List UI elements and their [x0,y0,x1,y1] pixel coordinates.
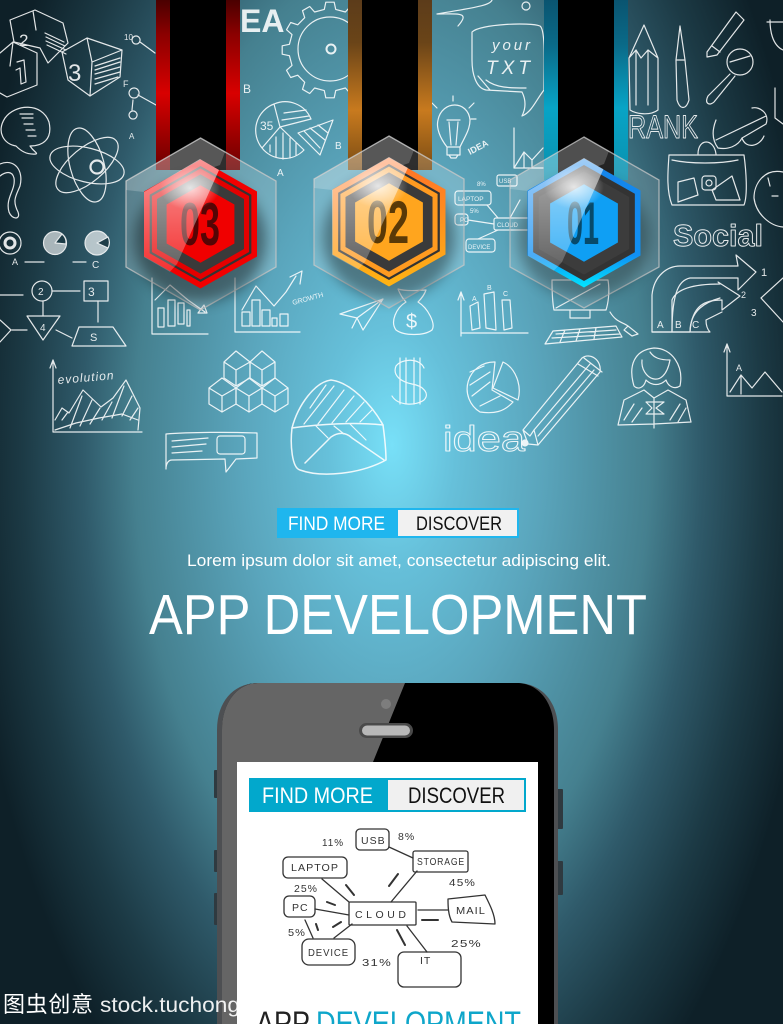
speaker [359,723,413,738]
doodles: pie dots and flowchart: A [12,257,18,267]
number 03: 03 [180,191,220,258]
cloud diagram: DEVICE [308,947,349,959]
doodles: small mind map: 8% [477,182,486,188]
doodles: small mind map: CLOUD [497,223,519,229]
screen buttons: FIND MORE [262,783,373,808]
screen reflection [222,683,405,1024]
doodles: pie dots and flowchart: S [90,332,97,344]
phone [214,683,563,1024]
cloud diagram: MAIL [456,905,486,917]
doodle: dollar sign [392,358,426,404]
doodles: top left cubes [0,10,122,97]
glass reflection [126,138,225,192]
cloud diagram: 25% [294,883,318,895]
cloud diagram: USB [361,835,386,847]
doodle: right chart [724,344,782,396]
doodles: bar charts, plane and money bag [152,271,433,334]
doodles: pie dots and flowchart: 3 [88,285,95,299]
doodles: bars and computer [458,280,638,344]
doodle: right chart: A [736,363,742,373]
doodles: top left cubes: 2 [19,31,28,50]
doodles: gear, pie and idea lettering: B [243,82,251,96]
cloud diagram: LAPTOP [291,862,339,874]
cloud diagram: 31% [362,957,392,969]
doodles: pens, magnifier and rank [628,12,767,149]
side buttons [214,770,563,925]
ribbon: orange [348,0,432,170]
doodle: idea lettering: idea [443,418,526,459]
cloud diagram [283,829,495,987]
title: APP DEVELOPMENT [149,583,647,647]
number 02: 02 [367,189,409,256]
glare [528,158,604,270]
doodle: evolution chart [50,360,142,432]
doodles: bars and computer: C [503,291,508,298]
badge 01: blue hexagon [510,137,659,308]
glass hexagon plate [126,138,276,310]
ribbon: blue [544,0,628,180]
doodles: gear, pie and idea lettering: A [277,168,284,179]
cloud diagram: STORAGE [417,856,465,868]
doodles: pens, magnifier and rank: RANK [628,109,698,145]
doodles: bulb, speech bubble and mini charts: TXT [486,58,531,79]
doodles: small mind map: LAPTOP [458,196,484,203]
doodles: left column speech bubble, atom, question mark [0,33,156,218]
doodle: evolution chart: evolution [57,368,114,387]
glare [144,159,219,272]
doodles: gear, pie and idea lettering [240,2,362,179]
doodles: bars and computer: A [472,296,477,303]
doodles: gear, pie and idea lettering: B [335,141,342,152]
cloud diagram: 45% [449,877,476,889]
screen title [260,1011,520,1024]
cloud diagram: 8% [398,831,415,843]
doodles: bars and computer: B [487,285,492,292]
doodles: bulb, speech bubble and mini charts: IDEA [466,138,490,157]
doodles: briefcase, clock, social and arrows [652,20,783,332]
doodles: gear, pie and idea lettering: EA [240,3,284,39]
button: find more / discover: FIND MORE [288,514,385,535]
cloud diagram: IT [420,955,431,967]
doodles: briefcase, clock, social and arrows: 2 [741,290,746,300]
doodles: small mind map: DEVICE [468,245,490,251]
drop shadow [518,178,650,298]
doodle: big pencil [522,356,602,446]
doodles: small mind map: USB [499,179,511,185]
doodles: pie dots and flowchart: 4 [40,323,46,334]
glass hexagon plate [510,137,659,308]
doodle: envelope [291,380,386,474]
doodles: small mind map [455,175,530,252]
glass reflection [510,137,609,191]
layered hexagons [528,158,640,288]
ribbon: red [156,0,240,170]
layered hexagons [144,160,257,288]
doodles: gear, pie and idea lettering: 35 [260,119,274,133]
doodles: small mind map: 5% [470,209,479,215]
layered hexagons [332,158,446,286]
subtitle: Lorem ipsum dolor sit amet, consectetur adipiscing elit. [187,551,611,570]
screen buttons [249,778,526,812]
doodles: bar charts, plane and money bag: GROWTH [292,292,324,307]
button: find more / discover [277,508,519,538]
glass reflection [314,136,414,190]
doodle: pie chart [467,362,519,413]
screen buttons: DISCOVER [408,783,505,808]
doodles: briefcase, clock, social and arrows: B [675,320,682,331]
doodles: bulb, speech bubble and mini charts [432,0,544,168]
doodles: briefcase, clock, social and arrows: 1 [761,267,767,279]
button: find more / discover: DISCOVER [416,514,502,535]
badge 01: blue hexagon: 01 [567,190,599,257]
doodles: briefcase, clock, social and arrows: C [692,320,699,331]
doodles: briefcase, clock, social and arrows: 3 [751,308,757,319]
doodles: briefcase, clock, social and arrows: A [657,320,664,331]
doodles: left column speech bubble, atom, question mark: A [129,132,135,141]
glass hexagon plate [314,136,464,308]
watermark: stock.tuchong [100,994,240,1017]
doodles: pie dots and flowchart: C [92,260,99,271]
badge 03: red hexagon [126,138,276,310]
camera [381,699,391,709]
cloud diagram: 5% [288,927,306,939]
doodles: left column speech bubble, atom, question mark: F [123,79,129,89]
cloud diagram: 25% [451,938,482,950]
doodles: bulb, speech bubble and mini charts: your [491,37,531,54]
doodles: small mind map: PC [460,218,469,224]
doodles: pie dots and flowchart [0,231,126,346]
doodles: left column speech bubble, atom, question mark: 10 [124,33,133,42]
cloud diagram: 11% [322,837,344,849]
doodle: cube pyramid [209,351,288,412]
glare [332,157,408,270]
doodles: briefcase, clock, social and arrows: Social [673,218,763,253]
cloud diagram: PC [292,902,309,914]
doodles: top left cubes: 3 [68,60,81,87]
doodle: message bubble [166,432,257,472]
doodles: pie dots and flowchart: 2 [38,287,44,298]
watermark: 图虫创意 [3,992,93,1017]
doodle: woman portrait [618,348,691,428]
watermark [3,992,288,1017]
badge 02: orange hexagon [314,136,464,308]
doodles: bar charts, plane and money bag: $ [406,311,417,333]
cloud diagram: CLOUD [355,909,407,921]
watermark: .com [240,994,288,1017]
screen [237,762,538,1024]
drop shadow [323,176,455,300]
phone body [217,683,558,1024]
drop shadow [134,178,266,302]
